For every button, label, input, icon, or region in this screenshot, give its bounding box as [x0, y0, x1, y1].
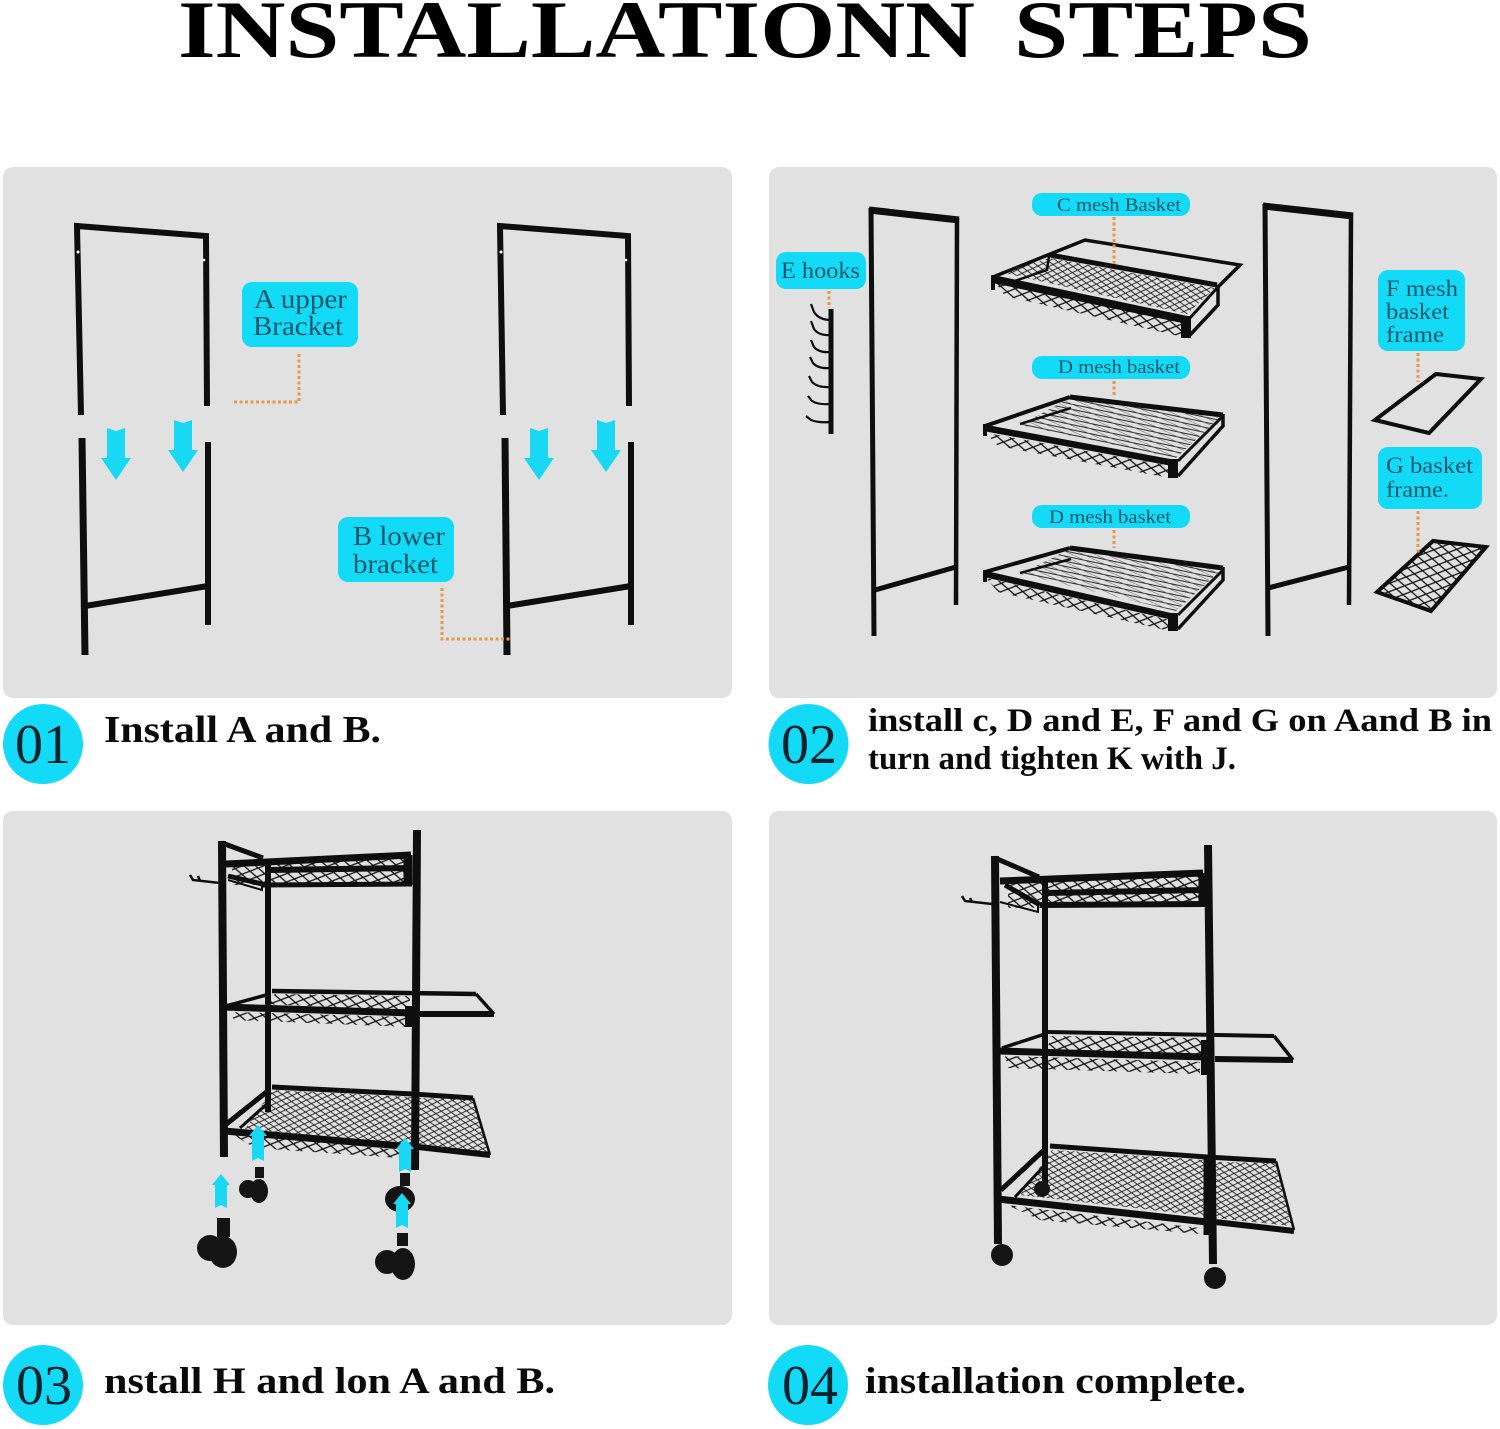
step 2 badge: 02 [781, 714, 837, 776]
label: G basket frame: frame. [1386, 477, 1449, 502]
basket D lower [985, 548, 1223, 631]
arrows pointing down [101, 420, 621, 480]
title [178, 0, 1312, 75]
step 4 badge: 04 [782, 1355, 838, 1417]
label: F mesh basket frame [1378, 270, 1465, 351]
panel: step 1 [3, 167, 732, 698]
right upper bracket [500, 226, 629, 415]
panel: step 3 [3, 811, 732, 1325]
label: D mesh basket lower: D mesh basket [1049, 507, 1172, 528]
frame F [1375, 374, 1481, 433]
label: D mesh basket upper: D mesh basket [1058, 357, 1181, 378]
label: E hooks: E hooks [781, 258, 860, 283]
label: E hooks [776, 252, 866, 289]
label: D mesh basket lower [1032, 505, 1190, 528]
step 1 caption: Install A and B. [104, 709, 381, 751]
frame right [1263, 204, 1353, 636]
label: C mesh basket: C mesh Basket [1057, 195, 1182, 216]
label: B lower bracket [338, 517, 454, 582]
left lower bracket [82, 438, 208, 655]
label: C mesh basket [1032, 193, 1190, 216]
panel: step 2 [769, 167, 1497, 698]
label: F mesh basket frame: F mesh [1386, 276, 1459, 301]
step 4 caption: installation complete. [865, 1361, 1246, 1402]
label: B lower bracket: B lower [353, 521, 445, 551]
panel: step 4 [769, 811, 1497, 1325]
label: F mesh basket frame: basket [1386, 299, 1450, 324]
label: A upper bracket [242, 282, 358, 347]
arrows pointing up [212, 1125, 414, 1228]
step 2 caption: turn and tighten K with J. [868, 741, 1236, 777]
leader lines [829, 217, 1418, 553]
basket C [993, 240, 1240, 338]
frame G [1377, 541, 1486, 611]
step 3 badge: 03 [16, 1355, 72, 1417]
step 2 caption [868, 703, 1492, 777]
step 4 badge [768, 1345, 848, 1425]
frame left [869, 208, 959, 636]
label: G basket frame: G basket [1386, 453, 1474, 478]
casters [991, 1181, 1226, 1289]
step 2 badge [768, 704, 848, 784]
label: A upper bracket: Bracket [253, 311, 344, 341]
label: G basket frame [1378, 447, 1482, 509]
leader line A [234, 352, 299, 402]
cart frame with shelves [190, 830, 494, 1170]
label: B lower bracket: bracket [353, 549, 439, 579]
step 1 badge [3, 704, 83, 784]
step 3 caption: nstall H and lon A and B. [104, 1361, 555, 1402]
hooks E [806, 304, 831, 434]
label: F mesh basket frame: frame [1386, 322, 1444, 347]
label: D mesh basket upper [1032, 356, 1190, 379]
basket D upper [985, 397, 1223, 478]
label: A upper bracket: A upper [254, 284, 347, 314]
left upper bracket [76, 226, 207, 415]
assembled cart [962, 845, 1294, 1264]
casters [197, 1167, 415, 1280]
step 1 badge: 01 [15, 714, 71, 776]
step 2 caption: install c, D and E, F and G on Aand B in [868, 703, 1492, 739]
right lower bracket [505, 438, 631, 655]
step 3 badge [3, 1345, 83, 1425]
leader line B [442, 588, 510, 639]
